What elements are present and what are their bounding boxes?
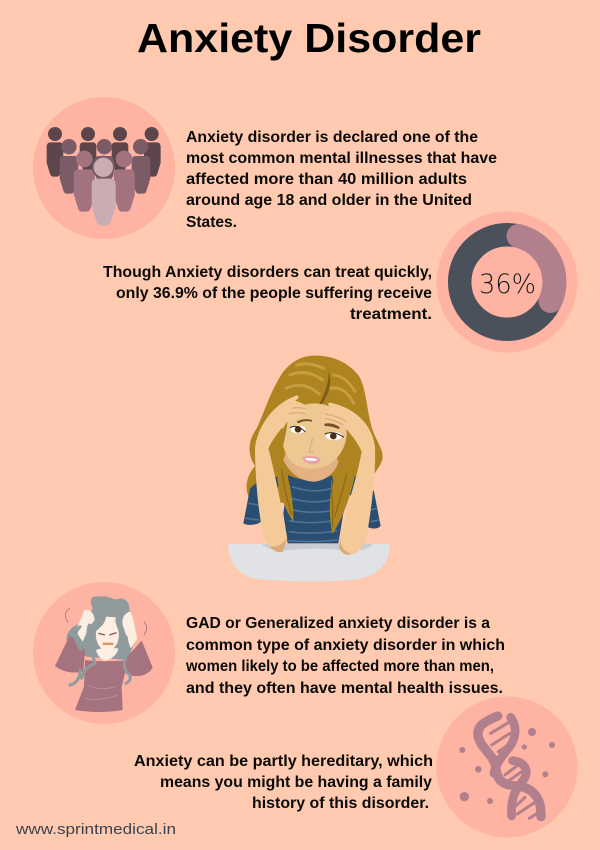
text block: treatment: treatment. <box>350 306 432 323</box>
text block: treatment: only 36.9% of the people suffering receive <box>116 285 432 302</box>
donut chart: 36%: 36% <box>479 269 536 300</box>
text block: prevalence: around age 18 and older in the United <box>186 192 472 209</box>
text block: hereditary <box>134 753 433 812</box>
text block: hereditary: means you might be having a family <box>160 774 432 791</box>
footer: website: www.sprintmedical.in <box>15 821 176 838</box>
illustration: worried woman at table <box>228 356 389 581</box>
text block: prevalence: Anxiety disorder is declared one of the <box>186 129 478 146</box>
icon: crowd of people <box>33 97 175 239</box>
icon: stressed woman <box>33 582 175 724</box>
text block: prevalence <box>186 129 497 231</box>
text block: hereditary: Anxiety can be partly hereditary, which <box>134 753 433 770</box>
text block: GAD: women likely to be affected more than men, <box>185 658 494 675</box>
text block: treatment <box>103 264 432 323</box>
text block: hereditary: history of this disorder. <box>252 795 429 812</box>
text block: GAD: GAD or Generalized anxiety disorder is a <box>186 615 490 632</box>
text block: treatment: Though Anxiety disorders can treat quickly, <box>103 264 432 281</box>
text block: prevalence: most common mental illnesses that have <box>186 150 497 167</box>
text block: GAD <box>185 615 505 697</box>
text block: prevalence: States. <box>186 214 237 231</box>
text block: prevalence: affected more than 40 million adults <box>186 171 467 188</box>
text block: GAD: and they often have mental health issues. <box>186 680 503 697</box>
donut chart: 36% <box>436 212 578 352</box>
icon: DNA helix <box>436 696 578 838</box>
title: Anxiety Disorder <box>137 15 481 61</box>
text block: GAD: common type of anxiety disorder in which <box>186 637 505 654</box>
